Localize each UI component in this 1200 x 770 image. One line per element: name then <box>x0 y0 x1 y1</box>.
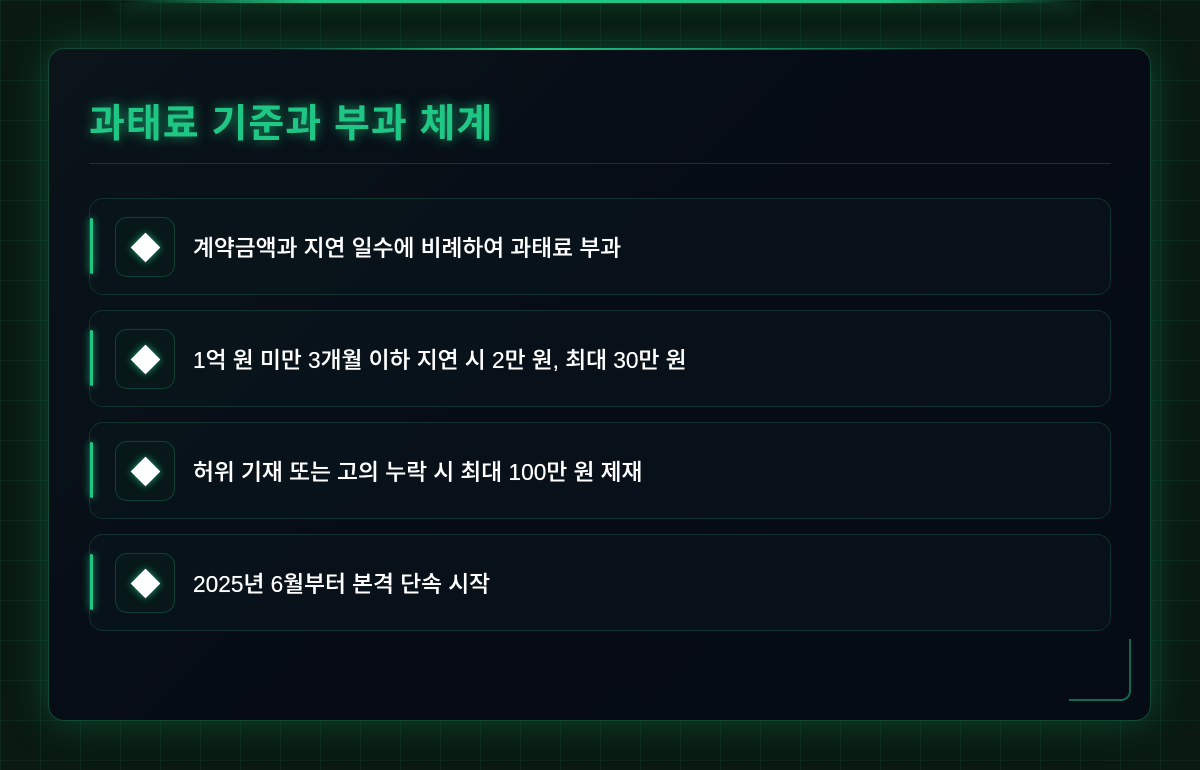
text 1: 계약금액과 지연 일수에 비례하여 과태료 부과 <box>193 235 621 261</box>
item 2 <box>89 310 1111 407</box>
title: 과태료 기준과 부과 체계 <box>89 103 493 146</box>
icon: diamond <box>115 217 175 277</box>
icon: diamond <box>115 553 175 613</box>
text 2: 1억 원 미만 3개월 이하 지연 시 2만 원, 최대 30만 원 <box>193 347 687 373</box>
text 4: 2025년 6월부터 본격 단속 시작 <box>193 571 490 597</box>
icon: diamond <box>115 441 175 501</box>
item 1 <box>89 198 1111 295</box>
item 4 <box>89 534 1111 631</box>
text 3: 허위 기재 또는 고의 누락 시 최대 100만 원 제재 <box>193 459 642 485</box>
item 3 <box>89 422 1111 519</box>
icon: diamond <box>115 329 175 389</box>
